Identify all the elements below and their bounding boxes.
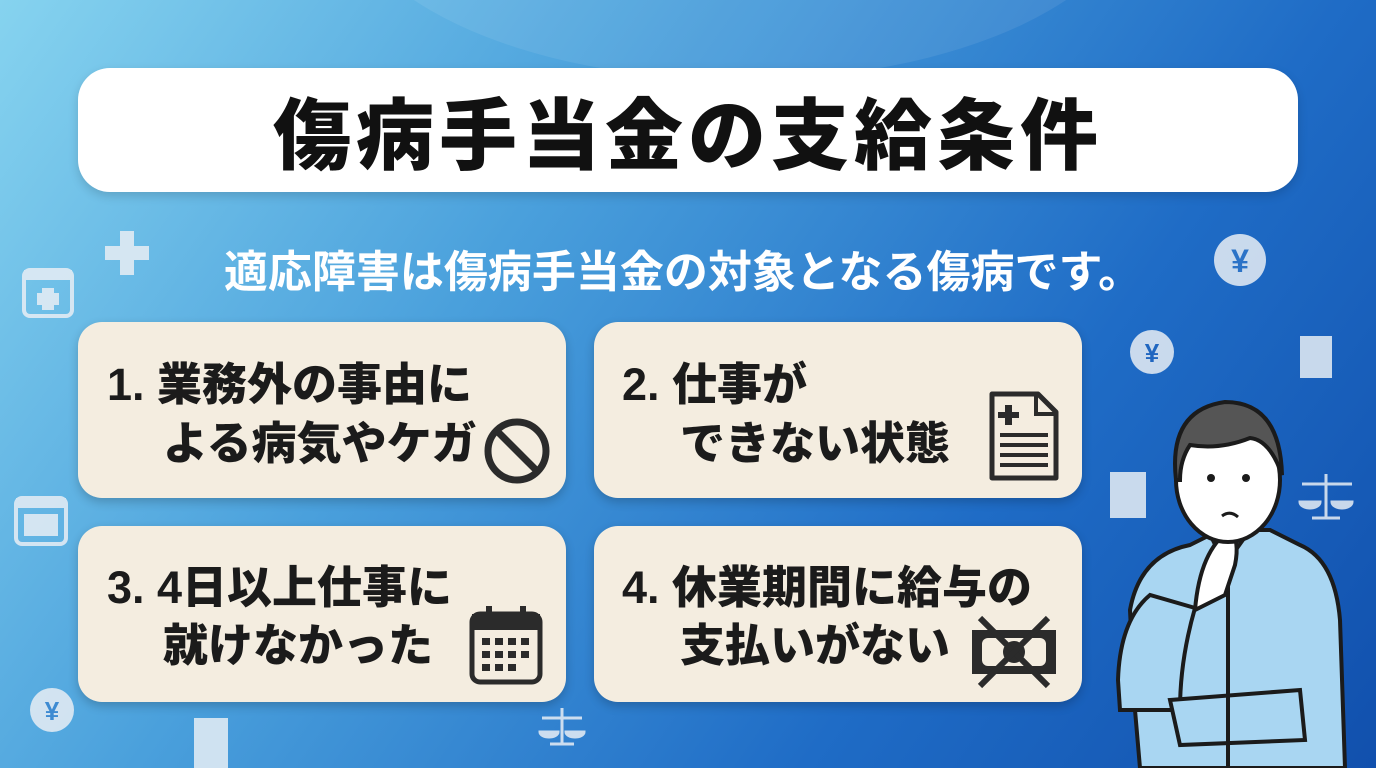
person illustration	[1116, 400, 1347, 768]
card 2: 2. 仕事が	[622, 359, 807, 410]
background icons: ¥	[1231, 243, 1249, 279]
title: 傷病手当金の支給条件	[273, 92, 1103, 180]
card 2	[594, 322, 1082, 498]
card 3	[78, 526, 566, 702]
background icons: ¥	[1145, 338, 1160, 368]
subtitle: 適応障害は傷病手当金の対象となる傷病です。	[224, 248, 1142, 297]
card 2: できない状態	[680, 418, 950, 469]
card 3: 3. 4日以上仕事に	[107, 562, 452, 613]
card 4	[594, 526, 1082, 702]
background icons: ¥	[45, 696, 60, 726]
card 4: 支払いがない	[680, 620, 950, 671]
icon: crossed-out money	[972, 616, 1056, 688]
card 1: よる病気やケガ	[163, 418, 477, 469]
card 1: 1. 業務外の事由に	[107, 359, 472, 410]
decorative circle	[340, 0, 1140, 80]
title	[78, 68, 1298, 192]
icon: calendar	[470, 606, 542, 684]
card 4: 4. 休業期間に給与の	[622, 562, 1032, 613]
card 1	[78, 322, 566, 498]
icon: medical document	[990, 392, 1058, 480]
icon: prohibited	[484, 418, 550, 484]
card 3: 就けなかった	[163, 620, 433, 671]
